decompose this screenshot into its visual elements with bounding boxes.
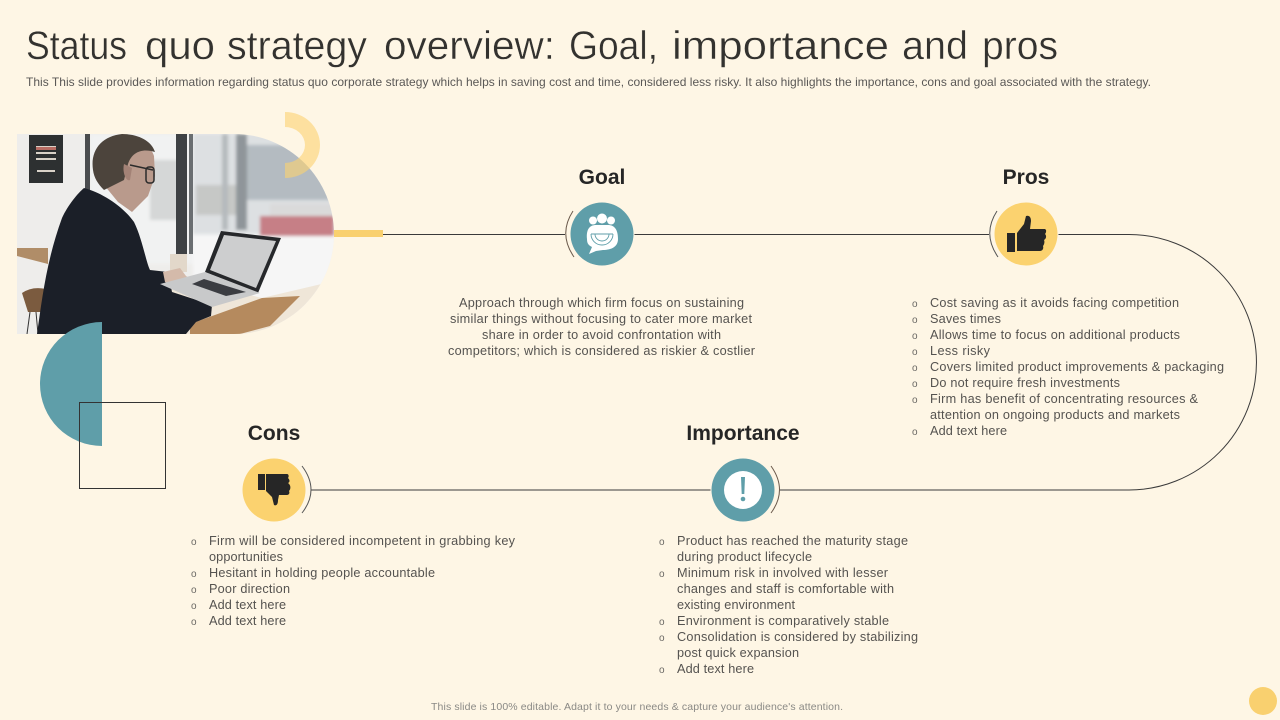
text block: goal description: share in order to avoid confrontation with <box>482 328 721 342</box>
text block: goal description: competitors; which is considered as riskier & costlier <box>448 344 756 358</box>
bullet list: pros: Cost saving as it avoids facing competition <box>930 296 1179 310</box>
bullet list: importance: o <box>659 617 665 628</box>
bullet list: importance: o <box>659 665 665 676</box>
table <box>172 284 320 334</box>
bullet list: importance: Add text here <box>677 662 754 676</box>
panel: goal <box>448 166 756 358</box>
laptop <box>205 231 281 293</box>
bullet list: pros: o <box>912 363 918 374</box>
text block: goal description <box>448 296 756 358</box>
bullet list: cons: opportunities <box>209 550 283 564</box>
icon: goal people target <box>565 202 634 266</box>
panel: pros <box>912 166 1224 438</box>
photo: man working on a laptop by a window <box>17 134 338 334</box>
bullet list: cons: o <box>191 537 197 548</box>
bullet list: importance: post quick expansion <box>677 646 799 660</box>
title: pros <box>982 24 1058 68</box>
bullet list: cons: o <box>191 585 197 596</box>
bullet list: importance: Minimum risk in involved with lesser <box>677 566 889 580</box>
bullet list: pros: o <box>912 395 918 406</box>
subtitle: This This slide provides information regarding status quo corporate strategy which helps in saving cost and time, considered less risky. It also highlights the importance, cons and goal associated with the strategy. <box>26 75 1151 89</box>
bullet list: importance: during product lifecycle <box>677 550 812 564</box>
bullet list: pros: attention on ongoing products and markets <box>930 408 1180 422</box>
text block: goal description: similar things without focusing to cater more market <box>450 312 752 326</box>
title: strategy <box>227 24 367 68</box>
outlined square <box>80 402 166 488</box>
jacket <box>37 188 212 334</box>
teal half circle <box>40 322 102 446</box>
hand and cup <box>170 254 187 272</box>
bullet list: pros: Covers limited product improvements & packaging <box>930 360 1224 374</box>
footer note: This slide is 100% editable. Adapt it to your needs & capture your audience's attention. <box>431 701 843 713</box>
title: importance <box>672 24 889 68</box>
corner yellow dot <box>1249 687 1277 715</box>
title: overview: <box>384 24 555 68</box>
bullet list: pros: o <box>912 299 918 310</box>
bullet list: importance: o <box>659 569 665 580</box>
bullet list: cons: o <box>191 601 197 612</box>
text block: goal description: Approach through which firm focus on sustaining <box>459 296 744 310</box>
heading: importance: Importance <box>686 422 800 445</box>
bullet list: pros: Do not require fresh investments <box>930 376 1120 390</box>
icon: thumbs down <box>242 458 311 522</box>
bullet list: importance: Product has reached the maturity stage <box>677 534 908 548</box>
icon: exclamation mark <box>710 458 780 522</box>
bullet list: importance <box>659 534 918 676</box>
bullet list: importance: Consolidation is considered by stabilizing <box>677 630 918 644</box>
heading: pros: Pros <box>1003 166 1049 189</box>
bullet list: importance: o <box>659 633 665 644</box>
connector line path <box>305 234 1256 490</box>
panel: importance <box>659 422 918 676</box>
bullet list: pros: o <box>912 379 918 390</box>
bullet list: cons: Firm will be considered incompetent in grabbing key <box>209 534 516 548</box>
poster <box>29 135 63 183</box>
bullet list: cons <box>191 534 516 628</box>
bullet list: pros: Allows time to focus on additional products <box>930 328 1180 342</box>
bullet list: cons: o <box>191 569 197 580</box>
head <box>107 150 155 212</box>
bullet list: pros: Less risky <box>930 344 991 358</box>
stool <box>22 288 46 312</box>
decorative yellow arc <box>285 112 320 178</box>
bullet list: pros: o <box>912 315 918 326</box>
bullet list: importance: changes and staff is comfortable with <box>677 582 894 596</box>
bullet list: pros: Add text here <box>930 424 1007 438</box>
bullet list: importance: o <box>659 537 665 548</box>
bullet list: pros: o <box>912 427 918 438</box>
bullet list: cons: o <box>191 617 197 628</box>
heading: cons: Cons <box>248 422 300 445</box>
bullet list: pros: Saves times <box>930 312 1001 326</box>
icon: thumbs up <box>989 202 1058 266</box>
bullet list: importance: Environment is comparatively stable <box>677 614 889 628</box>
yellow connector bar <box>334 230 383 237</box>
title: and <box>902 24 968 68</box>
title: Status <box>26 24 127 68</box>
bullet list: pros: o <box>912 347 918 358</box>
panel: cons <box>191 422 516 628</box>
title: quo <box>145 24 215 68</box>
bullet list: cons: Add text here <box>209 598 286 612</box>
bullet list: importance: existing environment <box>677 598 795 612</box>
bullet list: cons: Hesitant in holding people accountable <box>209 566 435 580</box>
bullet list: pros: o <box>912 331 918 342</box>
bullet list: cons: Poor direction <box>209 582 290 596</box>
heading: goal: Goal <box>579 166 625 189</box>
bullet list: cons: Add text here <box>209 614 286 628</box>
title: Goal, <box>569 24 658 68</box>
bullet list: pros <box>912 296 1224 438</box>
bullet list: pros: Firm has benefit of concentrating resources & <box>930 392 1199 406</box>
